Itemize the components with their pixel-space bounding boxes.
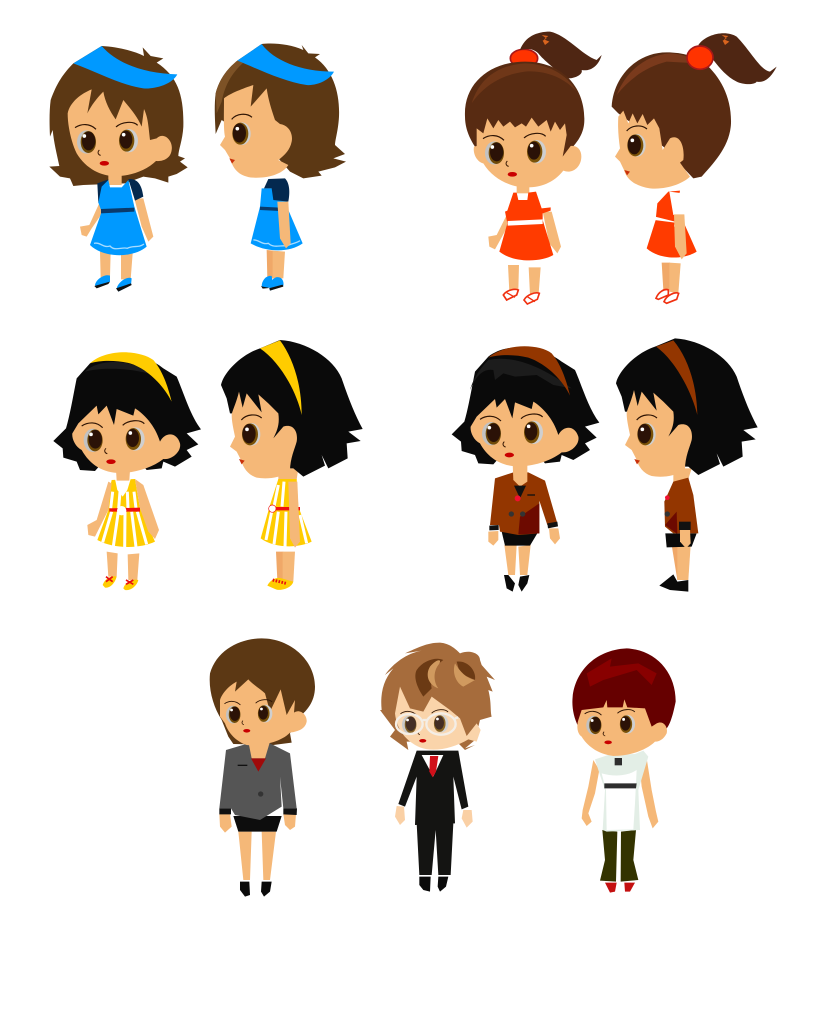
character: girl in brown jacket, front: [452, 346, 599, 592]
neck: [513, 463, 527, 487]
dress: [97, 479, 155, 547]
character: girl in brown jacket, side: [616, 338, 758, 592]
facial features: [624, 126, 647, 175]
legs: [504, 545, 531, 575]
face: [395, 687, 481, 750]
legs: [276, 552, 283, 580]
legs: [107, 552, 139, 580]
shoes: [504, 575, 529, 592]
stripes: [103, 492, 147, 548]
ponytail highlight: [722, 35, 729, 45]
facial features: [480, 414, 543, 457]
hem: [253, 240, 300, 246]
neck: [517, 185, 529, 193]
collar: [115, 479, 131, 497]
band: [90, 352, 172, 402]
belt: [101, 208, 134, 213]
sleeves: [97, 179, 143, 203]
jacket shadow: [518, 503, 539, 534]
face: [220, 679, 307, 745]
hands: [395, 806, 473, 828]
character: girl in red dress, side: [612, 33, 777, 303]
hair ball: [510, 49, 538, 67]
arms: [87, 479, 159, 539]
jacket: [398, 751, 468, 825]
shirt: [422, 755, 443, 777]
arm: [674, 214, 687, 259]
hands: [488, 528, 560, 546]
trousers: [600, 830, 638, 882]
hair highlight: [85, 362, 153, 375]
head: [616, 338, 758, 477]
skirt: [233, 816, 282, 832]
dress: [90, 180, 147, 255]
bows: [106, 577, 133, 584]
dress light: [602, 770, 637, 830]
facial features: [634, 415, 657, 464]
inner top: [251, 758, 266, 772]
dress: [499, 192, 553, 260]
neck: [116, 470, 130, 481]
glasses: [396, 713, 458, 735]
hair dark strands: [415, 659, 475, 697]
shoes: [103, 576, 138, 590]
legs: [238, 832, 276, 880]
hair highlight: [470, 359, 572, 390]
head: [53, 354, 201, 473]
facial features: [229, 114, 252, 164]
facial features: [239, 415, 262, 464]
hair highlight: [472, 63, 577, 103]
hair: [465, 62, 584, 157]
band: [260, 340, 302, 415]
waist band: [654, 217, 675, 223]
belt: [260, 207, 280, 211]
brooch: [515, 495, 521, 501]
hem: [94, 243, 144, 249]
hair highlight: [216, 61, 243, 113]
character: girl in blue dress, side: [215, 44, 346, 291]
character: woman in grey suit: [210, 638, 315, 897]
character: person in black suit with glasses: [380, 643, 495, 892]
shoes: [605, 883, 635, 893]
button: [665, 511, 670, 517]
shoes: [419, 877, 448, 892]
waist band: [508, 219, 543, 226]
dress: [251, 188, 303, 250]
legs: [508, 265, 541, 295]
neck: [278, 468, 298, 480]
belt: [604, 783, 637, 788]
band: [656, 340, 697, 415]
facial features: [400, 710, 448, 743]
shoes: [262, 276, 273, 288]
arm: [288, 482, 300, 548]
hair: [572, 648, 676, 730]
tie: [429, 756, 438, 777]
facial features: [483, 133, 546, 177]
shoes: [240, 882, 272, 897]
dress: [647, 191, 697, 258]
hair highlight: [617, 53, 698, 95]
ponytail: [520, 32, 602, 78]
legs: [662, 263, 670, 290]
cuffs: [489, 522, 558, 530]
hair: [210, 638, 315, 745]
head: [452, 347, 599, 466]
cuffs: [219, 808, 297, 815]
arms: [80, 198, 153, 242]
hands: [219, 814, 296, 833]
character: girl in blue dress, front: [49, 46, 188, 292]
head: [221, 340, 363, 478]
brooch: [665, 495, 670, 500]
dress: [595, 751, 648, 832]
legs: [672, 545, 678, 580]
face: [474, 118, 581, 187]
face: [220, 85, 292, 178]
jacket shadow: [665, 512, 677, 534]
band: [488, 346, 570, 396]
hair: [380, 643, 495, 750]
arm: [277, 202, 291, 248]
buttons: [527, 493, 535, 497]
hair highlights: [428, 660, 475, 688]
shoes: [95, 275, 132, 292]
button: [258, 791, 263, 797]
character: girl in yellow striped dress, front: [53, 352, 201, 590]
dress: [261, 479, 312, 546]
skirt: [665, 533, 697, 547]
inner top: [514, 486, 526, 498]
belt: [109, 508, 140, 512]
band: [73, 46, 177, 88]
cuff: [679, 522, 691, 530]
facial features: [82, 421, 145, 464]
hair: [49, 46, 188, 186]
pocket: [238, 763, 247, 767]
face: [68, 89, 172, 176]
buckle: [117, 506, 126, 515]
neck: [673, 468, 692, 482]
legs: [267, 250, 273, 278]
face: [577, 699, 667, 756]
shoes: [267, 578, 293, 590]
facial features: [75, 122, 138, 166]
sandal straps: [507, 293, 535, 302]
hair: [215, 44, 346, 178]
skirt: [502, 532, 538, 546]
arms: [488, 212, 561, 253]
shoes: [659, 574, 688, 592]
facial features: [585, 710, 635, 744]
character: girl in yellow striped dress, side: [221, 340, 363, 590]
neck: [108, 173, 122, 185]
sandals: [503, 289, 539, 304]
jacket: [490, 472, 557, 535]
hair: [612, 52, 731, 178]
neck tab: [615, 758, 622, 765]
ponytail highlight: [542, 35, 549, 45]
sleeve: [264, 178, 289, 202]
sandals: [656, 290, 679, 303]
legs: [100, 252, 133, 279]
arm: [680, 530, 691, 548]
hem: [99, 541, 153, 553]
arms: [582, 758, 658, 828]
stripes: [266, 482, 307, 547]
face: [615, 111, 690, 189]
jacket: [219, 743, 297, 820]
character: person in white top and olive trousers: [572, 648, 676, 893]
neck: [248, 742, 270, 758]
ponytail: [698, 33, 777, 84]
band: [237, 44, 334, 85]
trousers: [417, 823, 453, 875]
hair ball: [687, 46, 713, 69]
jacket: [664, 478, 698, 533]
belt: [272, 507, 300, 510]
sleeve: [669, 192, 685, 215]
buckle: [269, 505, 276, 512]
hair highlights: [587, 658, 657, 687]
character: girl in red dress, front: [465, 32, 602, 304]
facial features: [224, 700, 272, 733]
shoe bow: [273, 580, 286, 583]
